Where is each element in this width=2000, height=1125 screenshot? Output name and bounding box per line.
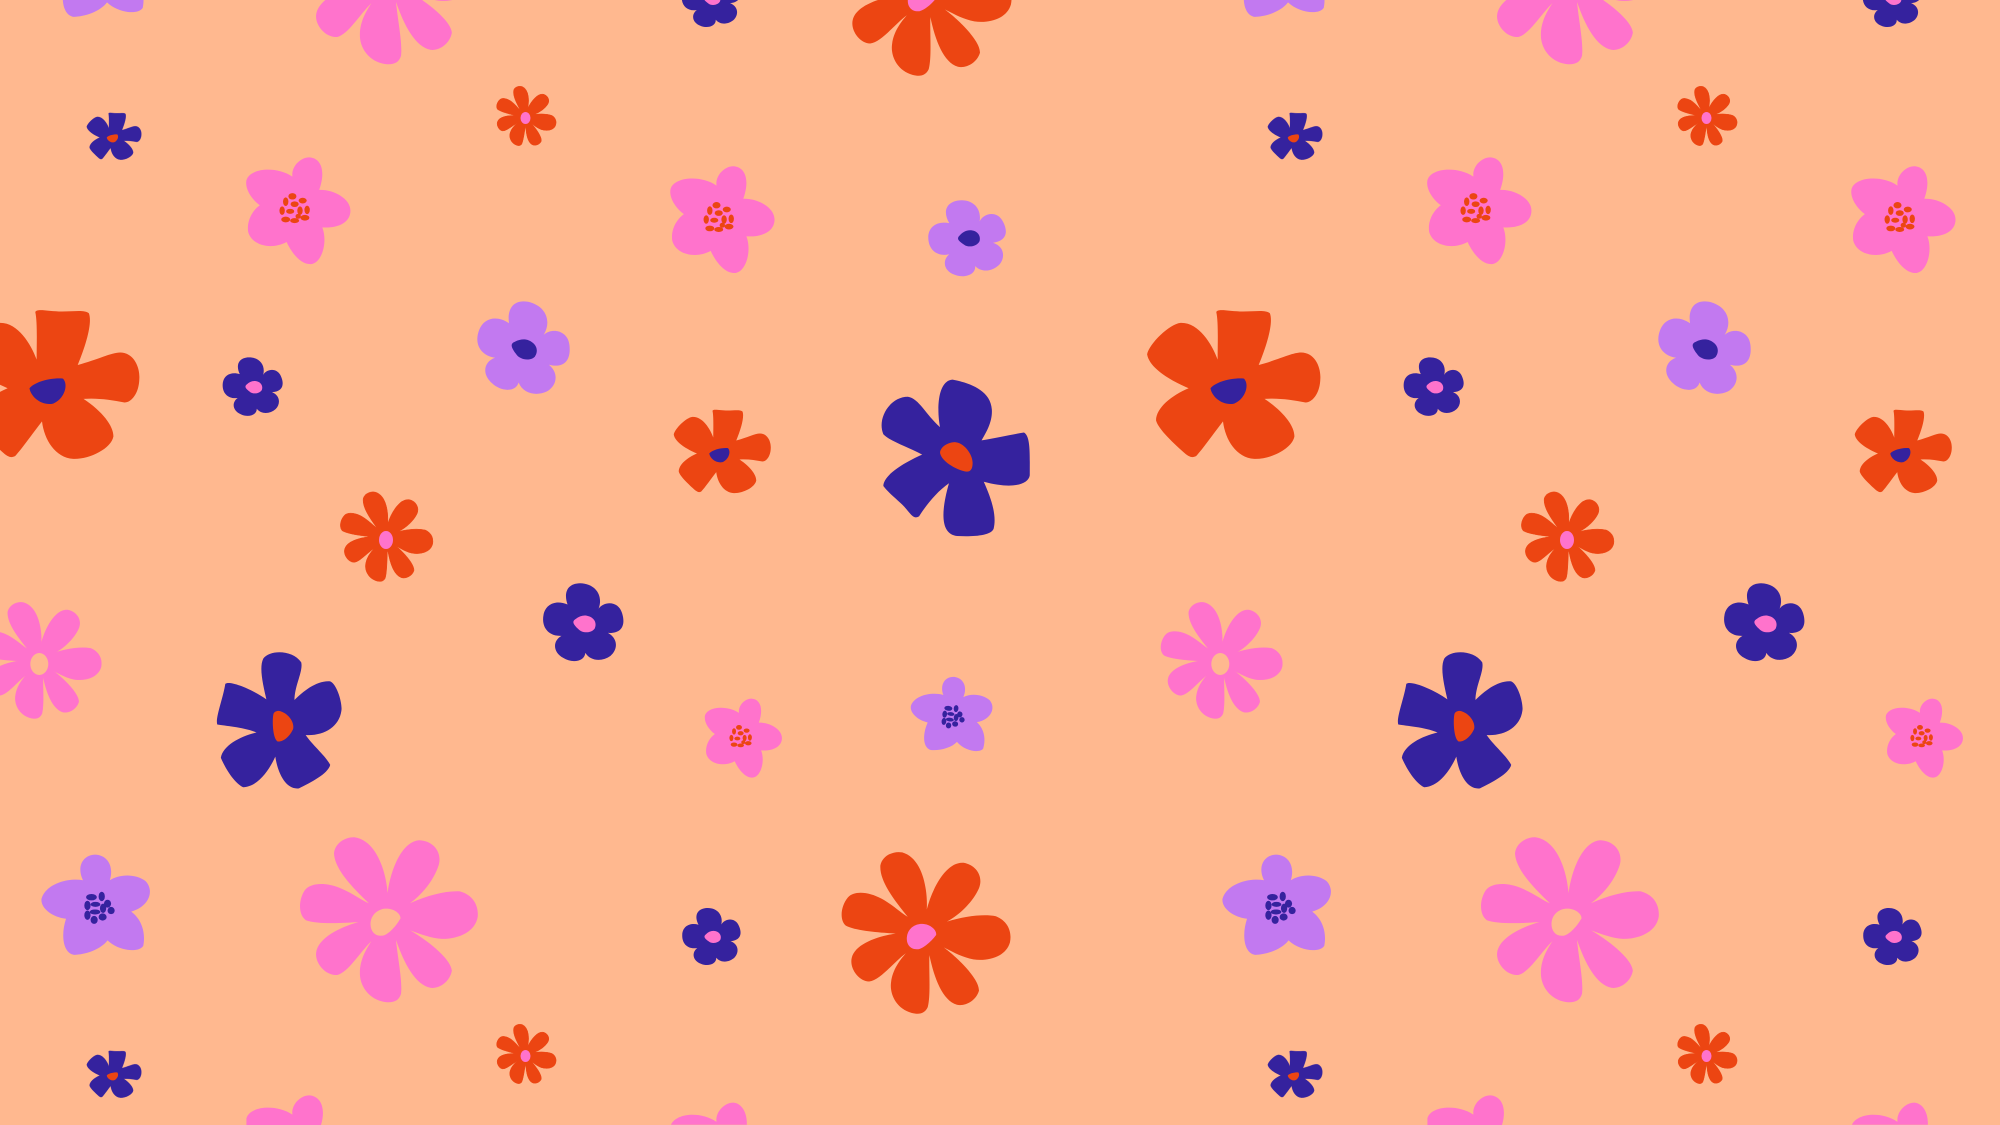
flower: navy medium right <box>1717 577 1810 669</box>
flower: small pink speckled right <box>1886 699 1963 778</box>
flower: small orange right <box>1855 410 1952 493</box>
flower: big pink left <box>300 837 478 1002</box>
flower: purple left <box>462 288 582 408</box>
flower: tiny navy bottom left <box>87 1051 141 1098</box>
flower: purple right <box>1643 288 1763 408</box>
flower: orange daisy right <box>1513 487 1621 590</box>
flower: purple top left <box>41 0 149 17</box>
flower: navy top right <box>1861 0 1922 29</box>
flower: navy small right <box>1401 355 1466 419</box>
flower: pink cut off bottom B right <box>1852 1103 1928 1125</box>
flower: big orange right <box>1147 310 1320 459</box>
flower: pink cut off bottom B left <box>671 1103 747 1125</box>
flower: big navy centre <box>882 380 1030 536</box>
flower: navy lower right <box>1862 907 1923 967</box>
flower: pink speckled B left <box>670 166 775 273</box>
flower: purple top right <box>1222 0 1330 17</box>
flower: tiny orange left <box>487 81 564 154</box>
flower: big navy right <box>1398 652 1523 788</box>
flower: tiny navy bottom right <box>1268 1051 1322 1098</box>
flower: big pink right <box>1481 837 1659 1002</box>
flower: pink daisy right <box>1153 598 1289 726</box>
flower: navy top left <box>680 0 741 29</box>
flower: navy lower left <box>681 907 742 967</box>
flower: orange daisy left <box>332 487 440 590</box>
flower: purple speckled left <box>41 855 150 955</box>
flower: tiny navy right <box>1268 113 1322 160</box>
flower: big navy left <box>217 652 342 788</box>
flower: big orange daisy centre <box>831 846 1019 1024</box>
flower: pink speckled A right <box>1427 157 1531 264</box>
flower: tiny navy left <box>87 113 141 160</box>
flower: navy medium left <box>536 577 629 669</box>
flower: big orange left <box>0 310 139 459</box>
flower: tiny orange bottom left <box>487 1019 564 1092</box>
flower: purple speckled right <box>1222 855 1331 955</box>
flower: pink top left <box>300 0 478 64</box>
flower: pink cut off bottom A right <box>1427 1095 1504 1125</box>
flower: orange top centre <box>832 0 1020 86</box>
flower: tiny orange right <box>1668 81 1745 154</box>
flower: pink speckled A left <box>246 157 350 264</box>
flower: small orange left <box>674 410 771 493</box>
flower: pink top right <box>1481 0 1659 64</box>
flower: navy small left <box>220 355 285 419</box>
flower: tiny orange bottom right <box>1668 1019 1745 1092</box>
flower: pink speckled B right <box>1851 166 1956 273</box>
flower: small pink speckled left <box>705 699 782 778</box>
flower: small purple centre <box>928 200 1006 276</box>
flower: small purple speckled centre <box>907 673 995 756</box>
flower: pink cut off bottom A left <box>246 1095 323 1125</box>
flower: pink daisy left <box>0 598 108 726</box>
